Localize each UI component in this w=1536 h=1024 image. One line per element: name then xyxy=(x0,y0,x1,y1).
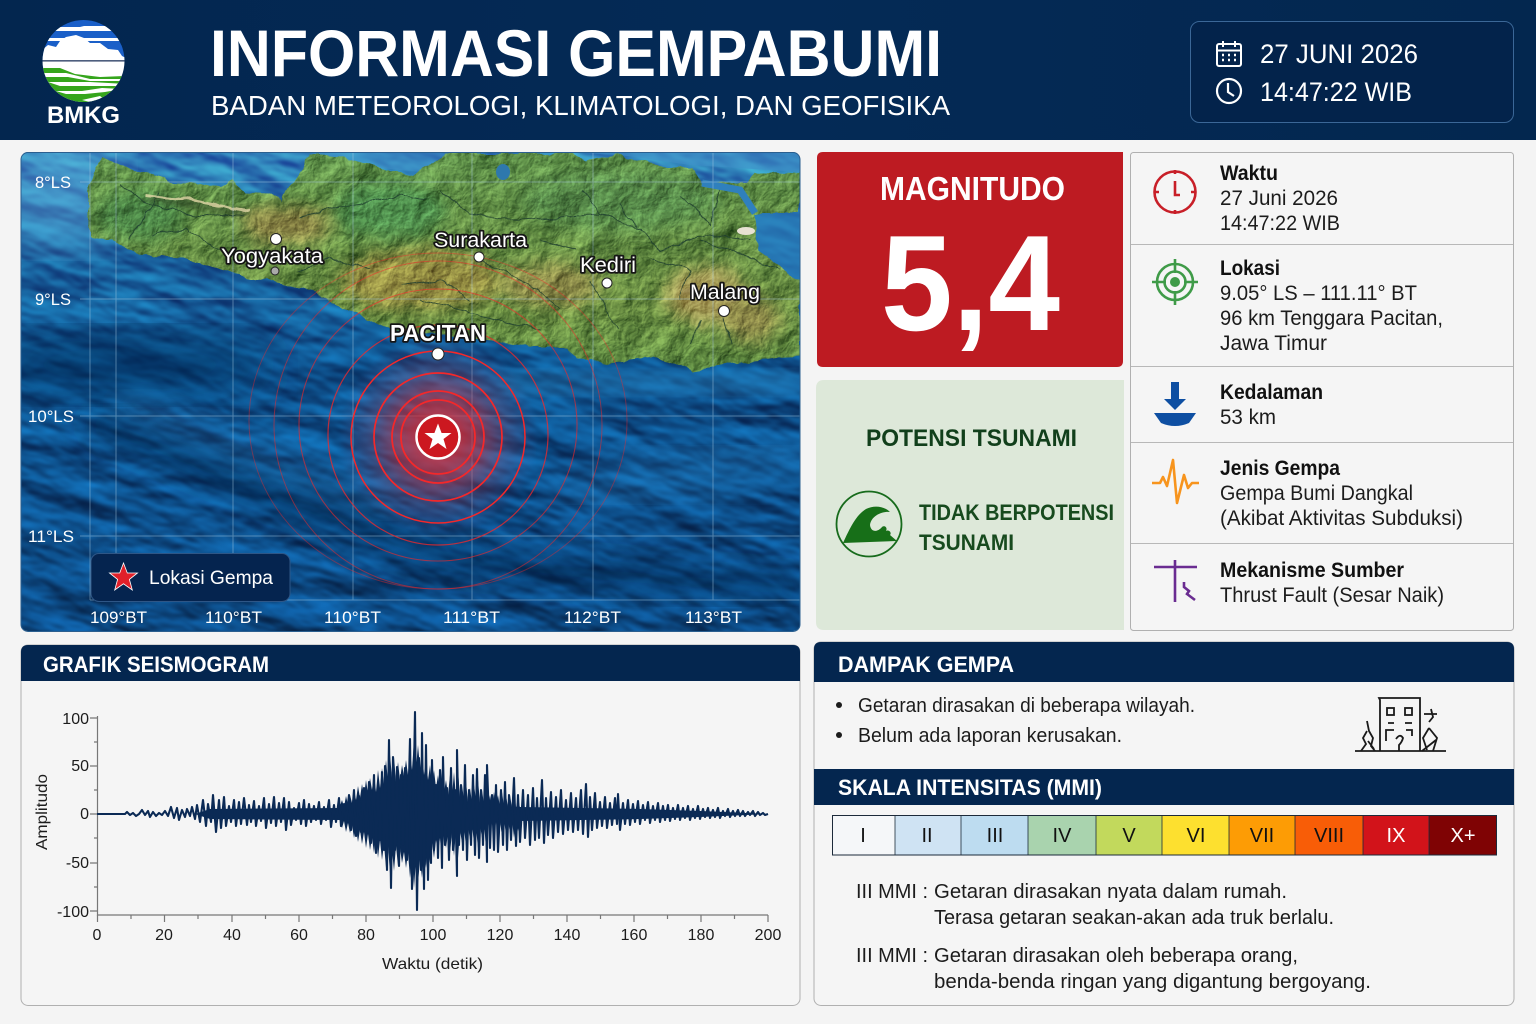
x axis labels xyxy=(93,927,781,944)
icon: epicenter star xyxy=(416,416,460,458)
icon: BMKG logo xyxy=(42,20,126,129)
MMI descriptions: Terasa getaran seakan-akan ada truk berlalu. xyxy=(934,907,1334,929)
longitude labels xyxy=(91,612,742,623)
kedalaman text xyxy=(1220,381,1323,429)
MMI scale bar: VIII xyxy=(1314,825,1344,847)
impact bullet list: Getaran dirasakan di beberapa wilayah. xyxy=(858,695,1195,717)
lokasi text: 96 km Tenggara Pacitan, xyxy=(1220,307,1443,330)
x axis labels: 0 xyxy=(93,927,102,944)
MMI descriptions: III MMI : xyxy=(856,881,928,903)
latitude labels: 10°LS xyxy=(28,407,74,426)
mekanisme text: Mekanisme Sumber xyxy=(1220,559,1404,582)
icon: depth arrow xyxy=(1154,382,1196,426)
MMI scale bar: II xyxy=(921,825,933,847)
row: waktu xyxy=(1154,162,1340,235)
icon: purple fault xyxy=(1154,560,1197,602)
map grid lines xyxy=(80,152,800,600)
lokasi text: Lokasi xyxy=(1220,257,1280,280)
seismogram waveform xyxy=(97,712,768,910)
city markers and labels: Yogyakata xyxy=(221,245,323,268)
lokasi text xyxy=(1220,257,1443,355)
icon: damaged building xyxy=(1355,698,1446,751)
x axis labels: 80 xyxy=(357,927,375,944)
MMI scale bar: IV xyxy=(1053,825,1072,847)
city markers and labels xyxy=(221,229,760,360)
row: mekanisme sumber xyxy=(1154,559,1444,607)
latitude labels: 11°LS xyxy=(28,527,74,546)
longitude labels: 110°BT xyxy=(324,608,381,627)
header band xyxy=(0,0,1536,140)
city markers and labels: Malang xyxy=(690,281,760,304)
x axis labels: 140 xyxy=(554,927,580,944)
longitude labels: 112°BT xyxy=(564,608,621,627)
magnitude label: MAGNITUDO xyxy=(880,170,1065,207)
subtitle: BADAN METEOROLOGI, KLIMATOLOGI, DAN GEOFISIKA xyxy=(211,90,950,121)
MMI scale bar: I xyxy=(860,825,866,847)
impact bullet list xyxy=(836,695,1195,747)
jenis gempa text: Jenis Gempa xyxy=(1220,457,1340,480)
y axis labels: -50 xyxy=(66,855,89,872)
intensity header xyxy=(814,769,1514,805)
logo wordmark: BMKG xyxy=(47,102,120,129)
mekanisme text: Thrust Fault (Sesar Naik) xyxy=(1220,584,1444,607)
city markers and labels: Surakarta xyxy=(434,229,527,252)
kedalaman text: Kedalaman xyxy=(1220,381,1323,404)
row: kedalaman xyxy=(1154,381,1323,429)
panel: earthquake details xyxy=(1130,152,1514,630)
latitude labels xyxy=(28,173,74,546)
x axis title: Waktu (detik) xyxy=(382,956,483,973)
chart axes xyxy=(90,716,768,922)
MMI scale bar: V xyxy=(1122,825,1136,847)
row: lokasi xyxy=(1152,257,1443,355)
seismic wave rings xyxy=(249,253,627,589)
longitude labels: 111°BT xyxy=(443,608,500,627)
icon: orange waveform xyxy=(1152,460,1199,503)
date: 27 JUNI 2026 xyxy=(1260,39,1418,69)
MMI scale bar: III xyxy=(987,825,1003,847)
MMI scale bar: VI xyxy=(1187,825,1205,847)
seismogram heading: GRAFIK SEISMOGRAM xyxy=(43,652,269,677)
x axis labels: 200 xyxy=(755,927,781,944)
x axis labels: 60 xyxy=(290,927,308,944)
lokasi text: 9.05° LS – 111.11° BT xyxy=(1220,282,1417,305)
longitude labels: 109°BT xyxy=(90,608,147,627)
icon: calendar xyxy=(1217,41,1241,66)
longitude labels: 110°BT xyxy=(205,608,262,627)
MMI scale bar: X+ xyxy=(1450,825,1476,847)
date and time box xyxy=(1190,22,1514,122)
MMI descriptions: Getaran dirasakan oleh beberapa orang, xyxy=(934,945,1298,967)
MMI scale bar: VII xyxy=(1250,825,1274,847)
panel: tsunami potential xyxy=(816,380,1124,630)
tsunami heading: POTENSI TSUNAMI xyxy=(866,425,1077,452)
jenis gempa text xyxy=(1220,457,1463,530)
waktu text: 27 Juni 2026 xyxy=(1220,187,1338,210)
waktu text: 14:47:22 WIB xyxy=(1220,212,1340,235)
legend: Lokasi Gempa xyxy=(149,568,273,589)
y axis labels: 0 xyxy=(80,806,89,823)
city markers and labels: PACITAN xyxy=(390,320,486,346)
title: INFORMASI GEMPABUMI xyxy=(210,16,942,90)
impact header xyxy=(814,642,1514,682)
x axis labels: 100 xyxy=(420,927,446,944)
longitude labels: 113°BT xyxy=(685,608,742,627)
kedalaman text: 53 km xyxy=(1220,406,1276,429)
row: jenis gempa xyxy=(1152,457,1463,530)
panel: magnitude xyxy=(817,152,1123,367)
icon: red clock xyxy=(1154,170,1196,214)
intensity header: SKALA INTENSITAS (MMI) xyxy=(838,775,1102,800)
x axis labels: 120 xyxy=(487,927,513,944)
x axis labels: 180 xyxy=(688,927,714,944)
y axis labels xyxy=(57,711,89,921)
panel: impact and intensity xyxy=(814,642,1514,1006)
latitude labels: 8°LS xyxy=(35,173,71,192)
x axis labels: 40 xyxy=(223,927,241,944)
impact header: DAMPAK GEMPA xyxy=(838,652,1014,677)
tsunami status: TIDAK BERPOTENSI xyxy=(919,500,1114,525)
panel: earthquake map xyxy=(20,152,800,632)
waktu text: Waktu xyxy=(1220,162,1278,185)
waktu text xyxy=(1220,162,1340,235)
panel: seismogram xyxy=(21,645,800,1006)
MMI descriptions xyxy=(856,881,1371,993)
x axis labels: 20 xyxy=(155,927,173,944)
icon: tsunami wave xyxy=(836,492,902,556)
x axis labels: 160 xyxy=(621,927,647,944)
y axis labels: -100 xyxy=(57,904,89,921)
lokasi text: Jawa Timur xyxy=(1220,332,1327,355)
MMI descriptions: III MMI : xyxy=(856,945,928,967)
legend xyxy=(91,554,290,602)
MMI scale bar: IX xyxy=(1387,825,1405,847)
city markers and labels: Kediri xyxy=(580,254,636,277)
MMI scale bar xyxy=(832,815,1497,855)
MMI descriptions: benda-benda ringan yang digantung bergoyang. xyxy=(934,971,1371,993)
tsunami status xyxy=(919,500,1114,555)
icon: green target xyxy=(1152,259,1198,305)
time: 14:47:22 WIB xyxy=(1260,77,1412,107)
icon: clock xyxy=(1217,79,1241,103)
tsunami status: TSUNAMI xyxy=(919,530,1014,555)
latitude labels: 9°LS xyxy=(35,290,71,309)
y axis labels: 100 xyxy=(62,711,89,728)
jenis gempa text: Gempa Bumi Dangkal xyxy=(1220,482,1413,505)
island coast land xyxy=(87,153,800,372)
impact bullet list: Belum ada laporan kerusakan. xyxy=(858,725,1122,747)
jenis gempa text: (Akibat Aktivitas Subduksi) xyxy=(1220,507,1463,530)
mekanisme text xyxy=(1220,559,1444,607)
magnitude value: 5,4 xyxy=(881,207,1060,359)
MMI descriptions: Getaran dirasakan nyata dalam rumah. xyxy=(934,881,1287,903)
y axis title: Amplitudo xyxy=(34,774,51,850)
y axis labels: 50 xyxy=(71,758,89,775)
